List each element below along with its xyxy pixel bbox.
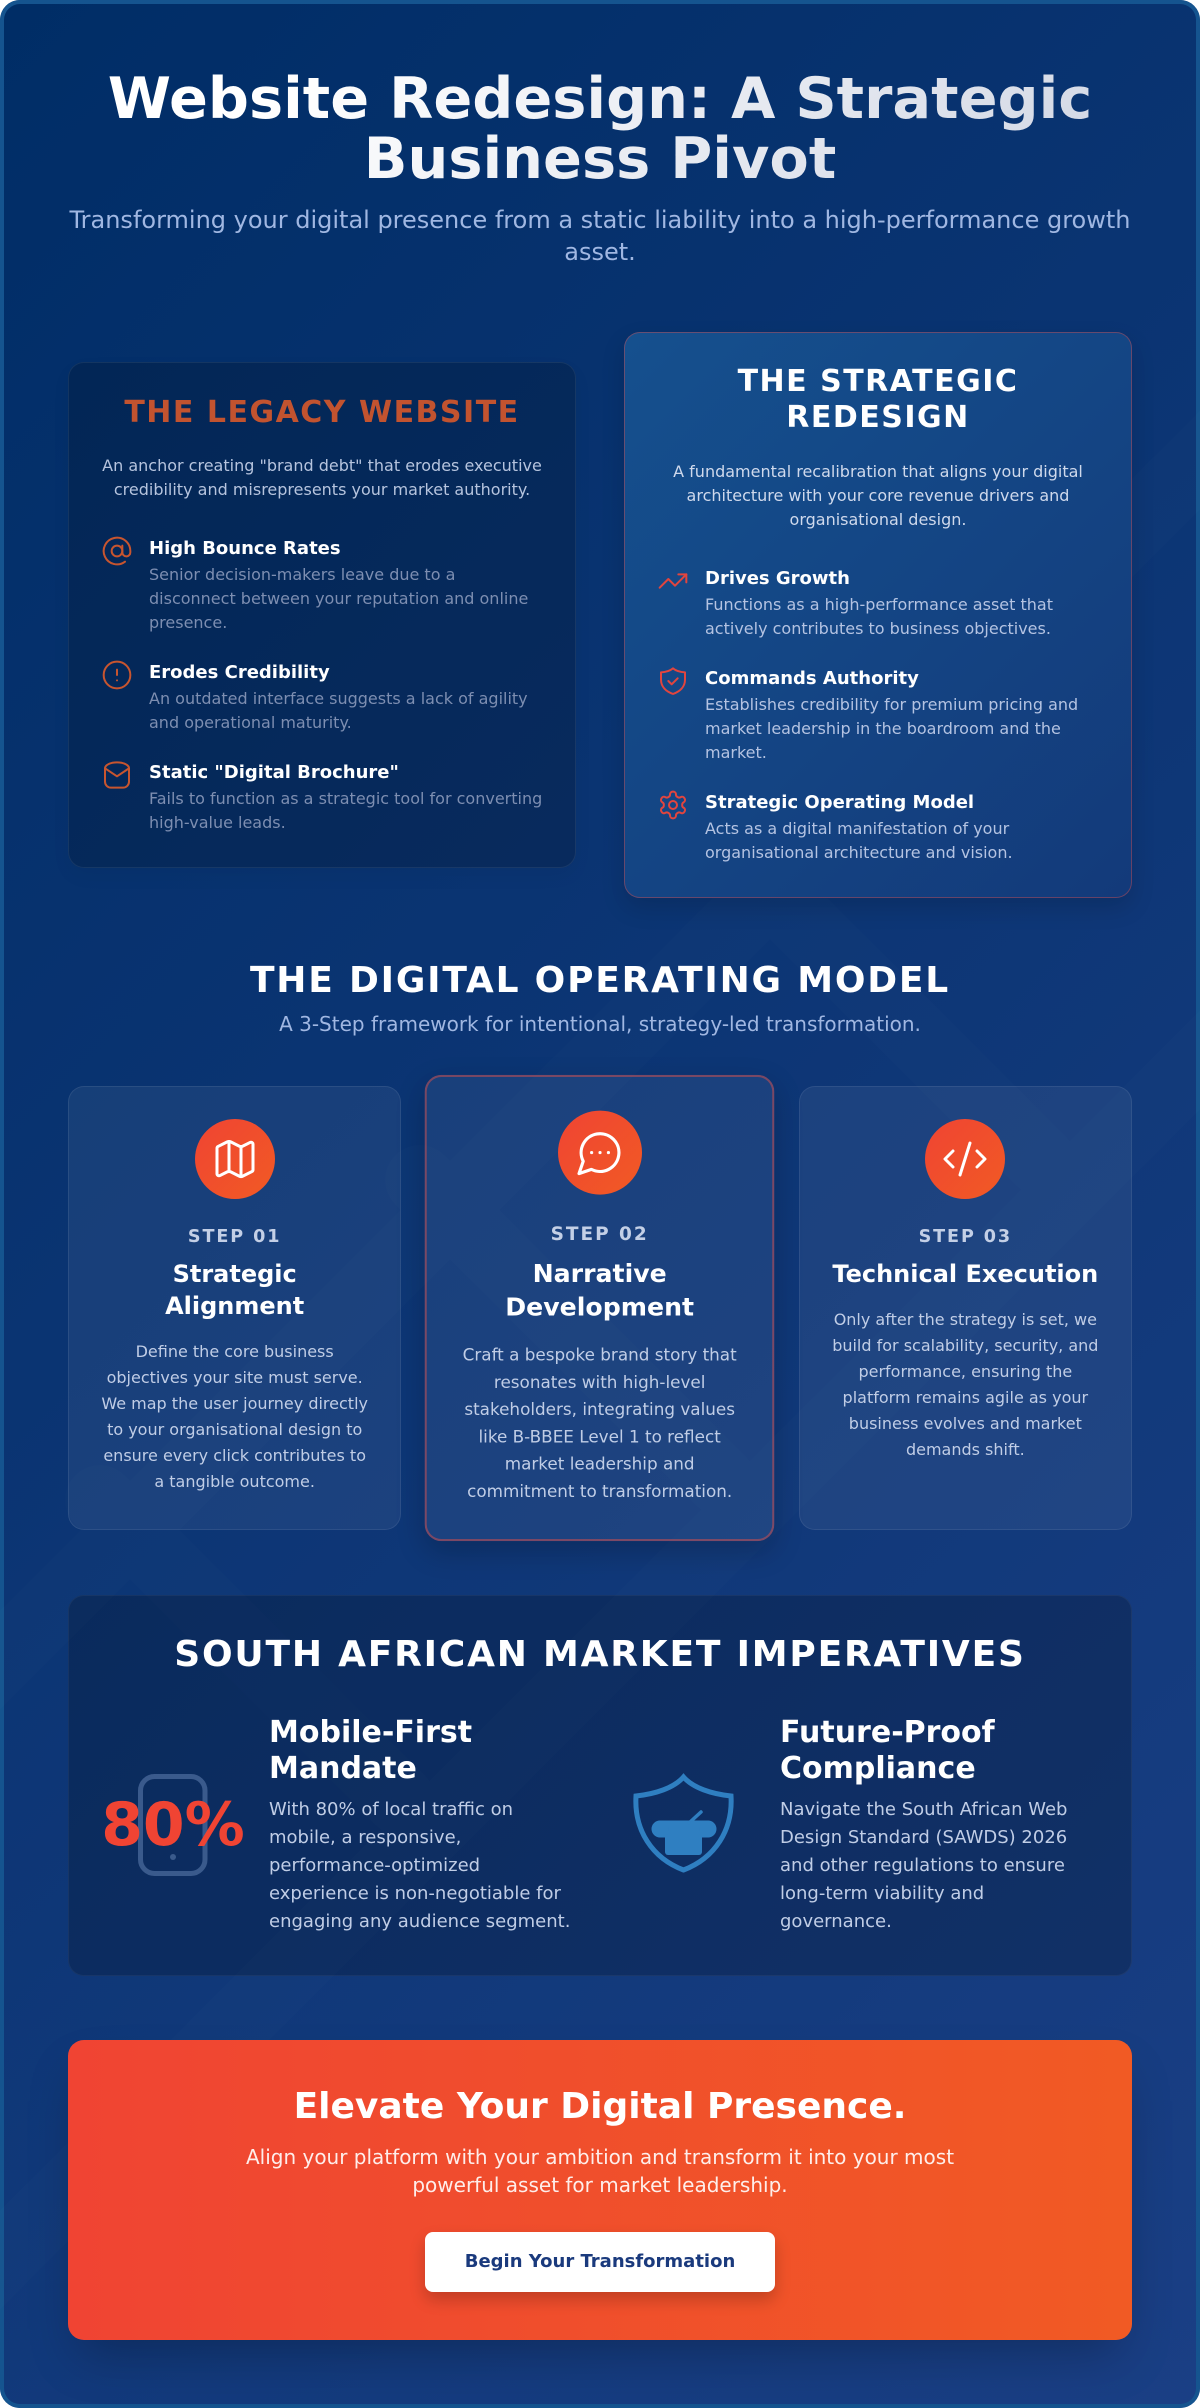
icon: shield with emblem <box>633 1773 734 1873</box>
item text: Senior decision-makers leave due to a <box>149 564 455 584</box>
item: drives growth <box>658 568 1053 638</box>
icon: message bubble <box>558 1111 642 1195</box>
item title: Drives Growth <box>705 568 850 589</box>
step text: Only after the strategy is set, we <box>834 1310 1097 1328</box>
item text: high-value leads. <box>149 812 286 832</box>
strategic description: organisational design. <box>790 510 966 529</box>
button: Begin Your Transformation <box>465 2251 735 2272</box>
item text: presence. <box>149 612 227 632</box>
step label: STEP 02 <box>551 1224 649 1245</box>
step title: Development <box>506 1292 694 1322</box>
icon: shield check <box>660 667 686 695</box>
icon: phone <box>138 1774 208 1876</box>
item title: Commands Authority <box>705 668 919 689</box>
text: mobile-first: experience is non-negotiable for <box>269 1883 561 1904</box>
strategic description: architecture with your core revenue drivers and <box>687 486 1069 505</box>
text: compliance: Design Standard (SAWDS) 2026 <box>780 1827 1067 1848</box>
panel: call to action <box>68 2040 1132 2340</box>
subtitle: asset. <box>564 238 636 266</box>
icon: map <box>195 1119 275 1199</box>
heading: mobile-first mandate <box>269 1715 472 1786</box>
item title: High Bounce Rates <box>149 538 341 559</box>
item: strategic operating model <box>660 790 1013 862</box>
step text <box>463 1344 737 1501</box>
step text: to your organisational design to <box>107 1420 362 1438</box>
step text: We map the user journey directly <box>101 1394 368 1412</box>
heading: future-proof compliance <box>780 1715 995 1786</box>
icon: trending up <box>658 573 688 589</box>
step text: Craft a bespoke brand story that <box>463 1344 737 1364</box>
step title <box>165 1260 304 1320</box>
heading: strategic redesign: REDESIGN <box>786 400 970 435</box>
text: mobile-first: engaging any audience segment. <box>269 1911 570 1932</box>
item text <box>149 564 528 632</box>
step text: objectives your site must serve. <box>107 1368 363 1386</box>
title: Business Pivot <box>364 124 836 192</box>
step title: Technical Execution <box>832 1260 1098 1288</box>
panel: step 02 highlighted <box>425 1075 775 1541</box>
item text: Fails to function as a strategic tool for converting <box>149 788 542 808</box>
call to action text: Align your platform with your ambition and transform it into your most <box>246 2145 954 2169</box>
text: compliance <box>780 1799 1067 1932</box>
strategic description <box>673 462 1083 529</box>
step title: Strategic <box>173 1260 297 1288</box>
item: high bounce rates <box>102 536 528 632</box>
heading: strategic redesign <box>738 364 1018 435</box>
button <box>425 2232 775 2292</box>
step text: performance, ensuring the <box>858 1362 1072 1380</box>
heading: future-proof compliance: Future-Proof <box>780 1715 995 1750</box>
call to action text: powerful asset for market leadership. <box>412 2173 788 2197</box>
item text <box>149 788 542 832</box>
call to action text <box>246 2145 954 2197</box>
legacy description: credibility and misrepresents your market authority. <box>114 480 530 499</box>
legacy description <box>102 456 542 499</box>
item text: actively contributes to business objectives. <box>705 618 1051 638</box>
icon: code <box>925 1119 1005 1199</box>
text: mobile-first: performance-optimized <box>269 1855 480 1876</box>
text: compliance: long-term viability and <box>780 1883 984 1904</box>
step label: STEP 03 <box>919 1227 1012 1247</box>
step text <box>832 1310 1098 1458</box>
item text <box>149 688 528 732</box>
step text: a tangible outcome. <box>154 1472 315 1490</box>
step label: STEP 01 <box>188 1227 281 1247</box>
item text: disconnect between your reputation and online <box>149 588 528 608</box>
heading: strategic redesign: THE STRATEGIC <box>738 364 1018 399</box>
item: erodes credibility <box>102 660 528 732</box>
panel: step 03 <box>799 1086 1132 1530</box>
item text <box>705 694 1078 762</box>
item title: Static "Digital Brochure" <box>149 762 399 783</box>
item text: Acts as a digital manifestation of your <box>705 818 1009 838</box>
step text: Define the core business <box>136 1342 334 1360</box>
heading: market imperatives: SOUTH AFRICAN MARKET IMPERATIVES <box>174 1634 1026 1674</box>
item text: organisational architecture and vision. <box>705 842 1013 862</box>
item text: Establishes credibility for premium pricing and <box>705 694 1078 714</box>
subtitle <box>69 206 1130 266</box>
text: compliance: governance. <box>780 1911 892 1932</box>
item text: and operational maturity. <box>149 712 352 732</box>
text: mobile-first: mobile, a responsive, <box>269 1827 461 1848</box>
item text: market. <box>705 742 767 762</box>
icon: at sign <box>102 536 132 566</box>
step title <box>506 1259 694 1322</box>
step text: ensure every click contributes to <box>103 1446 366 1464</box>
heading: call to action: Elevate Your Digital Presence. <box>294 2086 906 2126</box>
step text: market leadership and <box>505 1453 695 1473</box>
heading: the digital operating model: THE DIGITAL OPERATING MODEL <box>250 960 950 1001</box>
item title: Erodes Credibility <box>149 662 330 683</box>
heading: legacy website: THE LEGACY WEBSITE <box>124 395 520 430</box>
item title: Strategic Operating Model <box>705 792 974 813</box>
step title: Narrative <box>533 1259 667 1288</box>
text: mobile-first: With 80% of local traffic on <box>269 1799 513 1820</box>
step text: business evolves and market <box>849 1414 1082 1432</box>
text: mobile-first <box>269 1799 570 1932</box>
legacy description: An anchor creating "brand debt" that erodes executive <box>102 456 542 475</box>
icon: alert circle <box>102 660 132 690</box>
step text <box>101 1342 368 1490</box>
item text: An outdated interface suggests a lack of agility <box>149 688 528 708</box>
icon: envelope box <box>104 761 130 789</box>
step text: resonates with high-level <box>494 1372 706 1391</box>
step text: platform remains agile as your <box>843 1388 1088 1406</box>
icon: gear <box>660 790 686 820</box>
step text: demands shift. <box>906 1440 1025 1458</box>
text: compliance: and other regulations to ensure <box>780 1855 1065 1876</box>
subtitle: Transforming your digital presence from a static liability into a high-performance growth <box>70 206 1130 234</box>
item: static digital brochure <box>104 761 542 832</box>
strategic description: A fundamental recalibration that aligns your digital <box>673 462 1083 481</box>
panel: south african market imperatives <box>68 1595 1132 1976</box>
item text <box>705 818 1013 862</box>
panel: the legacy website <box>68 362 576 868</box>
step text: stakeholders, integrating values <box>465 1399 735 1419</box>
item text: Functions as a high-performance asset that <box>705 594 1053 614</box>
stat: 80 percent: 80% <box>101 1790 245 1860</box>
heading: mobile-first mandate: Mobile-First <box>269 1715 472 1750</box>
title <box>68 68 1132 188</box>
step text: commitment to transformation. <box>467 1481 733 1501</box>
panel: step 01 <box>68 1086 401 1530</box>
item text <box>705 594 1053 638</box>
heading: future-proof compliance: Compliance <box>780 1751 976 1786</box>
item: commands authority <box>660 667 1078 762</box>
step title: Alignment <box>165 1292 304 1320</box>
step text: build for scalability, security, and <box>832 1336 1098 1354</box>
section subtitle: A 3-Step framework for intentional, strategy-led transformation. <box>279 1012 921 1036</box>
panel: the strategic redesign <box>624 332 1132 898</box>
heading: mobile-first mandate: Mandate <box>269 1751 417 1786</box>
item text: market leadership in the boardroom and the <box>705 718 1061 738</box>
step text: like B-BBEE Level 1 to reflect <box>479 1426 721 1446</box>
text: compliance: Navigate the South African Web <box>780 1799 1067 1820</box>
title: Website Redesign: A Strategic <box>108 64 1092 132</box>
